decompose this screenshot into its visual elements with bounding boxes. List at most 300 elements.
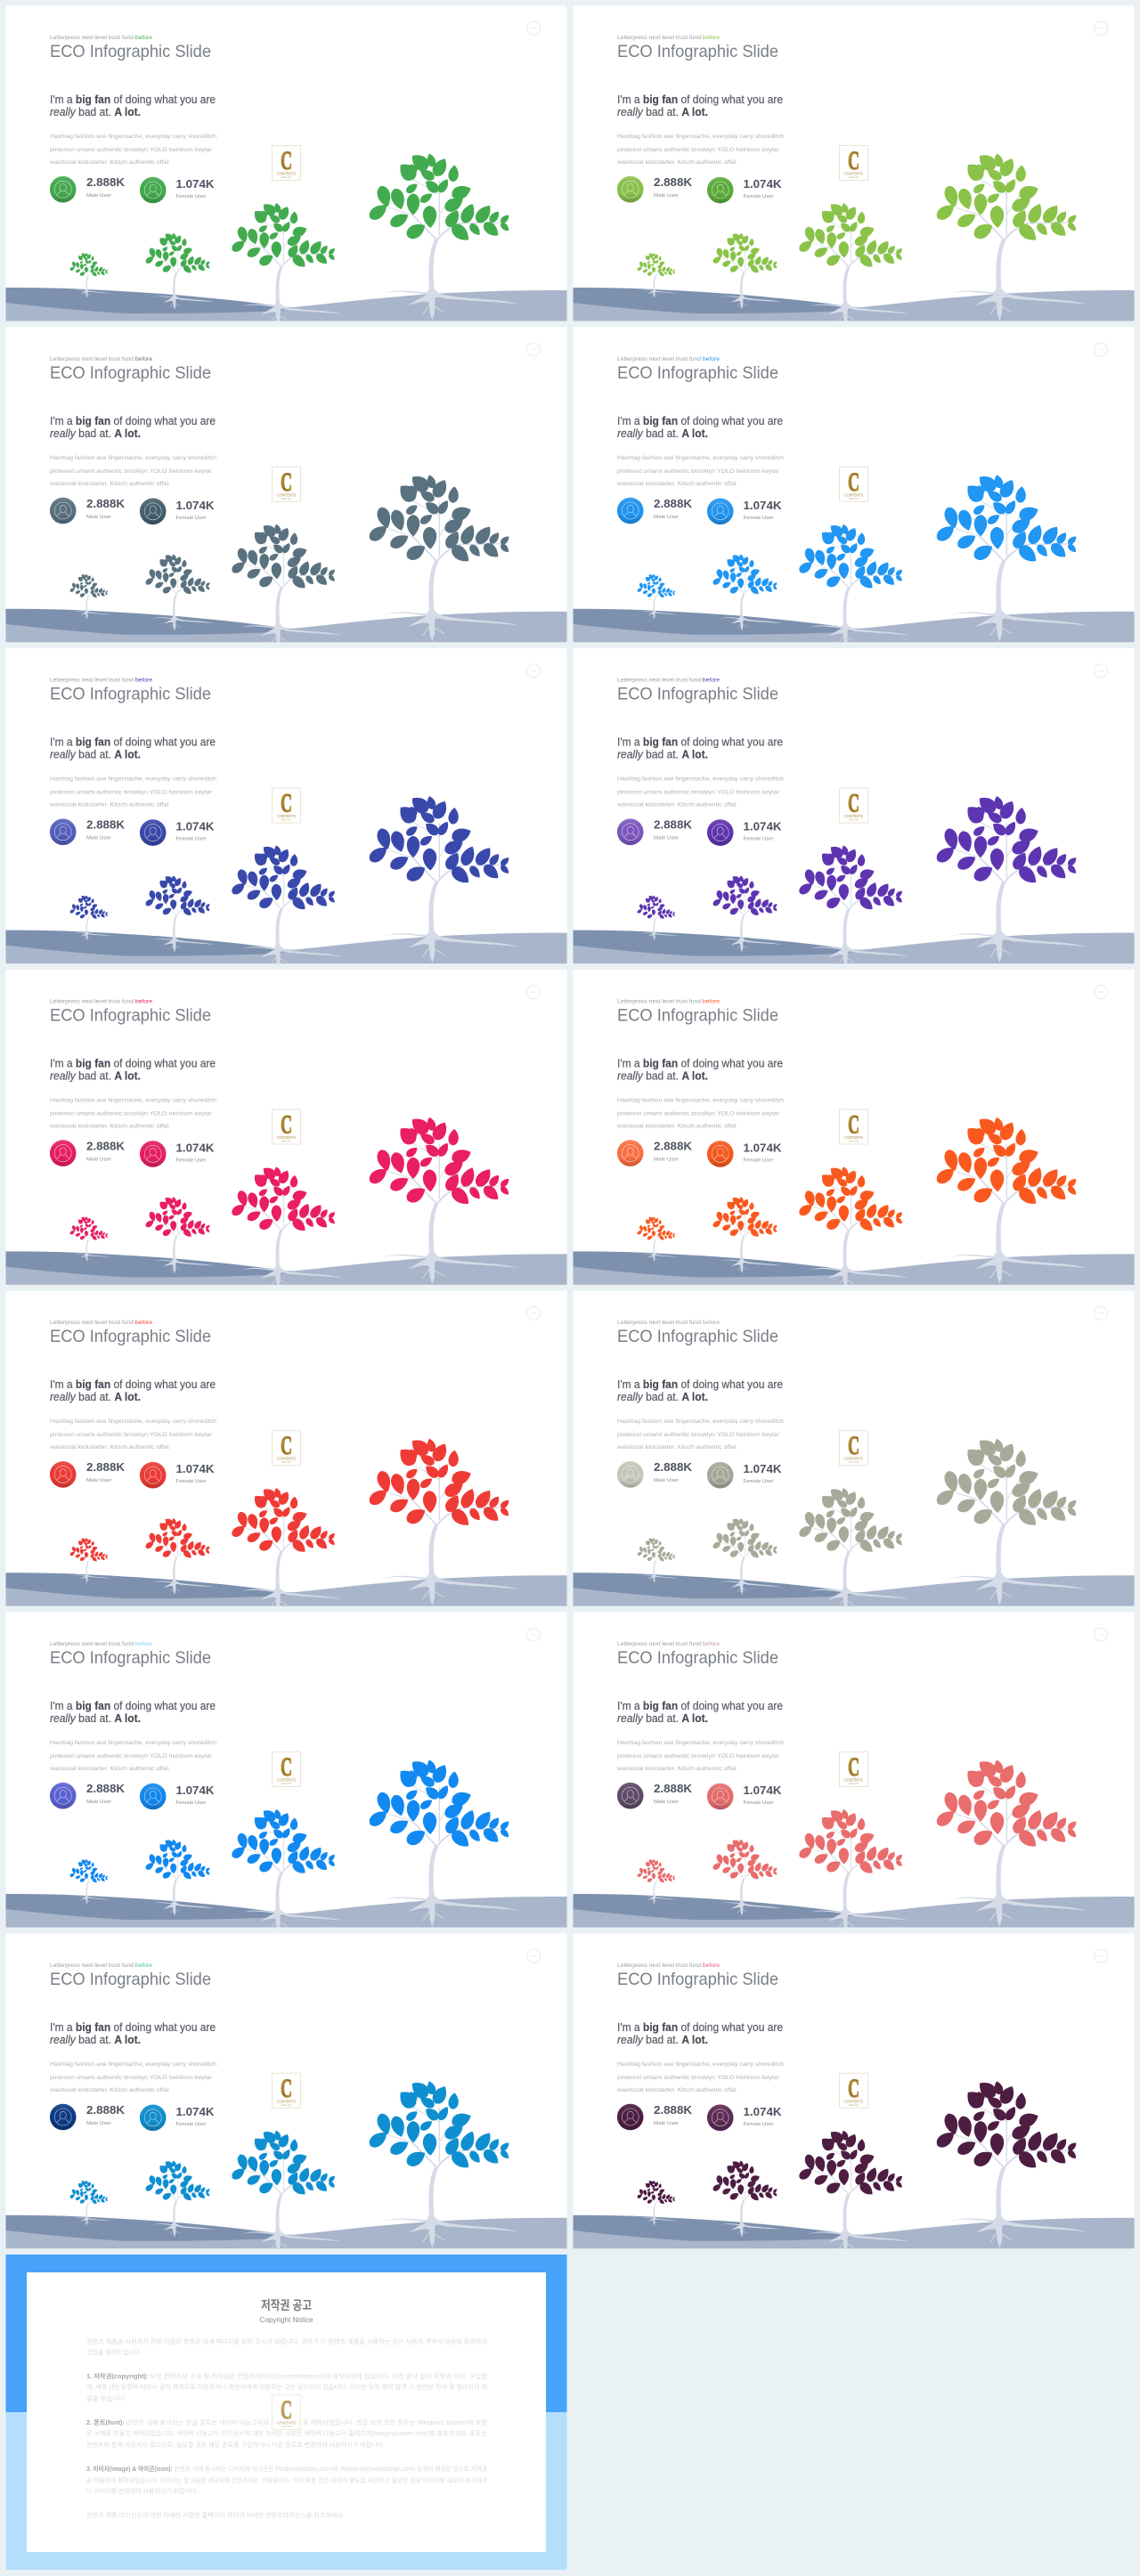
logo badge — [273, 1431, 301, 1466]
stat: male user: Male User — [654, 2121, 679, 2126]
icon: menu dots — [527, 343, 540, 356]
tree: young — [797, 522, 910, 647]
body text: pinterest umami authentic brooklyn YOLO heirloom keytar — [50, 1110, 213, 1117]
logo badge — [273, 2073, 301, 2108]
body text: waistcoat kickstarter. Kitsch authentic offal. — [49, 1444, 170, 1451]
stat: male user — [50, 1461, 125, 1488]
stat: female user: 1.074K — [176, 1463, 214, 1475]
stat: female user: Female User — [176, 516, 207, 521]
stat: female user — [140, 499, 214, 524]
stat: female user: 1.074K — [176, 1142, 214, 1154]
stat: female user — [707, 2105, 782, 2131]
icon: menu dots — [1094, 1949, 1108, 1962]
tree: mature — [933, 1114, 1087, 1284]
heading — [617, 2021, 783, 2046]
panel: azure slide — [5, 1612, 566, 1927]
heading — [50, 1378, 216, 1403]
tree: young — [797, 200, 910, 326]
logo badge — [839, 2073, 867, 2108]
copyright intro: 것임을 알려드립니다. — [86, 2348, 142, 2356]
title: ECO Infographic Slide — [50, 1970, 211, 1989]
ground — [573, 1572, 1135, 1607]
heading — [50, 1700, 216, 1725]
body text: Hashtag fashion axe fingerstache, everyday carry shoreditch — [50, 455, 216, 461]
stat: male user — [50, 1783, 125, 1809]
body text: pinterest umami authentic brooklyn YOLO heirloom keytar — [617, 468, 780, 475]
stat: male user: 2.888K — [86, 819, 125, 832]
tree: seedling — [637, 2180, 678, 2225]
copyright clause 2: 된 서체로 만들고 제작되었습니다. 네이버 나눔고딕 라이선스에 대한 자세한 사항은 네이버 나눔고딕 홈페이지(hangeul.naver.com)를 참조하세요. 폰트는 — [86, 2429, 488, 2437]
icon: menu dots — [527, 1949, 540, 1962]
body text: Hashtag fashion axe fingerstache, everyday carry shoreditch — [617, 134, 784, 140]
stat: male user: 2.888K — [654, 176, 692, 189]
stat: female user: 1.074K — [743, 2106, 782, 2118]
tree: sapling — [144, 874, 215, 952]
stat: male user: Male User — [86, 2121, 111, 2126]
title: ECO Infographic Slide — [50, 1327, 211, 1346]
panel: copyright notice — [5, 2255, 566, 2570]
icon: menu dots — [527, 21, 540, 35]
heading: really bad at. A lot. — [617, 1712, 708, 1725]
icon: menu dots — [1094, 21, 1108, 35]
tree: seedling — [637, 1215, 678, 1262]
ground — [5, 609, 567, 644]
body text: pinterest umami authentic brooklyn YOLO heirloom keytar — [50, 790, 213, 796]
tree: seedling — [69, 1215, 110, 1262]
heading — [50, 415, 216, 440]
stat: female user — [707, 1141, 782, 1167]
stat: female user: Female User — [743, 1479, 774, 1484]
body text — [616, 2061, 784, 2093]
body text: pinterest umami authentic brooklyn YOLO heirloom keytar — [50, 468, 213, 475]
heading: really bad at. A lot. — [617, 2034, 708, 2046]
body text: pinterest umami authentic brooklyn YOLO heirloom keytar — [50, 147, 213, 153]
panel: salmon slide — [574, 1612, 1135, 1927]
body text: Hashtag fashion axe fingerstache, everyday carry shoreditch — [50, 1740, 216, 1746]
body text: pinterest umami authentic brooklyn YOLO heirloom keytar — [50, 1753, 213, 1759]
tree: young — [797, 1485, 910, 1612]
copyright clause 1: 1. 저작권(copyright): 모든 컨텐츠의 소유 및 저작권은 컨텐츠메이커(Contentstoreout)와 제작자에게 있습니다. 사전 승낙 없이 모방과 이로, 구입한 — [86, 2372, 488, 2380]
logo badge — [839, 1431, 867, 1466]
stat: female user: Female User — [743, 2122, 774, 2127]
ground — [573, 1894, 1135, 1929]
stat: male user — [617, 819, 692, 845]
stat: male user — [50, 1140, 125, 1166]
icon: menu dots — [527, 986, 540, 999]
tree: young — [230, 1807, 343, 1932]
logo badge — [273, 2395, 301, 2429]
copyright title — [260, 2298, 314, 2324]
stat: female user — [707, 177, 782, 203]
panel: slate slide — [5, 327, 566, 643]
heading: I'm a big fan of doing what you are — [50, 1700, 216, 1712]
stat: female user — [140, 1141, 214, 1167]
stat: male user: Male User — [86, 1157, 111, 1162]
stat: male user: Male User — [654, 193, 679, 199]
tree: seedling — [637, 1537, 678, 1583]
stat: male user: 2.888K — [654, 819, 692, 832]
tree: mature — [933, 472, 1087, 642]
ground — [573, 288, 1135, 322]
body text: waistcoat kickstarter. Kitsch authentic offal. — [49, 1766, 170, 1772]
stat: male user: 2.888K — [86, 1140, 125, 1152]
tree: sapling — [712, 874, 782, 952]
tree: seedling — [69, 895, 110, 940]
panel: khaki slide — [574, 1291, 1135, 1606]
tree: sapling — [144, 1516, 215, 1595]
stat: male user: Male User — [86, 1800, 111, 1805]
tree: seedling — [69, 2180, 110, 2225]
tree: young — [230, 2128, 343, 2254]
stat: male user: 2.888K — [86, 176, 125, 189]
heading: really bad at. A lot. — [50, 1712, 141, 1725]
icon: menu dots — [1094, 664, 1108, 678]
body text: Hashtag fashion axe fingerstache, everyday carry shoreditch — [617, 776, 784, 783]
body text: Hashtag fashion axe fingerstache, everyday carry shoreditch — [617, 1418, 784, 1425]
stat: male user — [50, 2104, 125, 2130]
stat: male user — [617, 1783, 692, 1809]
eyebrow text: Letterpress next level trust fund before — [50, 1641, 152, 1647]
body text: pinterest umami authentic brooklyn YOLO heirloom keytar — [617, 790, 780, 796]
tree: sapling — [712, 553, 782, 631]
copyright intro — [86, 2337, 487, 2356]
ground — [573, 1251, 1135, 1286]
stat: female user: Female User — [743, 516, 774, 521]
heading: really bad at. A lot. — [617, 106, 708, 118]
copyright title: Copyright Notice — [260, 2315, 314, 2324]
tree: sapling — [712, 232, 782, 310]
stat: male user: 2.888K — [86, 1461, 125, 1474]
logo badge — [273, 146, 301, 180]
heading: really bad at. A lot. — [617, 1391, 708, 1403]
panel: cerulean slide — [5, 1933, 566, 2249]
body text — [49, 1418, 216, 1451]
stat: male user — [617, 1461, 692, 1488]
tree: young — [230, 200, 343, 326]
heading: really bad at. A lot. — [50, 2034, 141, 2046]
ground — [573, 930, 1135, 965]
title: ECO Infographic Slide — [50, 1648, 211, 1668]
body text: waistcoat kickstarter. Kitsch authentic offal. — [616, 1123, 737, 1129]
icon: menu dots — [1094, 986, 1108, 999]
body text: Hashtag fashion axe fingerstache, everyday carry shoreditch — [617, 455, 784, 461]
body text — [49, 776, 216, 809]
body text — [49, 1740, 216, 1772]
panel: green slide — [5, 5, 566, 321]
heading: I'm a big fan of doing what you are — [617, 1700, 783, 1712]
stat: female user: Female User — [176, 1479, 207, 1484]
heading: I'm a big fan of doing what you are — [50, 736, 216, 749]
body text: waistcoat kickstarter. Kitsch authentic offal. — [49, 481, 170, 487]
eyebrow text: Letterpress next level trust fund before — [50, 356, 152, 362]
stat: male user — [50, 819, 125, 845]
heading — [50, 736, 216, 761]
copyright clause 3: 다 이미지를 변경하여 사용하시기 바랍니다. — [86, 2487, 198, 2495]
stat: female user — [707, 499, 782, 524]
body text: waistcoat kickstarter. Kitsch authentic offal. — [49, 159, 170, 166]
tree: seedling — [637, 1858, 678, 1905]
body text: Hashtag fashion axe fingerstache, everyday carry shoreditch — [617, 2061, 784, 2068]
title: ECO Infographic Slide — [617, 1970, 778, 1989]
stat: female user: Female User — [176, 837, 207, 842]
tree: seedling — [69, 573, 110, 619]
tree: seedling — [69, 252, 110, 298]
heading: I'm a big fan of doing what you are — [617, 93, 783, 106]
body text — [616, 776, 784, 809]
copyright clause 1: 벌을 받습니다. — [86, 2394, 126, 2402]
copyright clause 1 — [86, 2372, 488, 2402]
stat: male user: Male User — [86, 193, 111, 199]
tree: sapling — [712, 2159, 782, 2238]
body text — [616, 1740, 784, 1772]
stat: female user: 1.074K — [743, 821, 782, 833]
stat: male user — [50, 176, 125, 203]
stat: female user — [140, 819, 214, 846]
eyebrow text: Letterpress next level trust fund before — [50, 1320, 152, 1326]
heading — [50, 2021, 216, 2046]
eyebrow text: Letterpress next level trust fund before — [50, 35, 152, 41]
heading: I'm a big fan of doing what you are — [50, 93, 216, 106]
stat: male user: 2.888K — [86, 1783, 125, 1795]
stat: female user — [140, 1784, 214, 1809]
title: ECO Infographic Slide — [617, 42, 778, 61]
body text: pinterest umami authentic brooklyn YOLO heirloom keytar — [617, 1432, 780, 1438]
copyright title: 저작권 공고 — [261, 2298, 312, 2312]
heading: really bad at. A lot. — [50, 427, 141, 440]
tree: young — [797, 843, 910, 969]
stat: female user: Female User — [743, 1158, 774, 1163]
tree: sapling — [712, 1195, 782, 1273]
stat: male user: 2.888K — [654, 498, 692, 510]
heading: I'm a big fan of doing what you are — [617, 736, 783, 749]
stat: male user: Male User — [86, 1478, 111, 1483]
stat: female user: 1.074K — [176, 500, 214, 512]
heading — [617, 1057, 783, 1082]
body text: pinterest umami authentic brooklyn YOLO heirloom keytar — [50, 1432, 213, 1438]
stat: male user: 2.888K — [654, 1783, 692, 1795]
heading: I'm a big fan of doing what you are — [617, 1378, 783, 1391]
logo badge — [273, 788, 301, 823]
stat: male user — [617, 498, 692, 524]
panel: orange slide — [574, 970, 1135, 1285]
body text — [616, 455, 784, 487]
heading: I'm a big fan of doing what you are — [50, 2021, 216, 2034]
tree: seedling — [637, 573, 678, 619]
eyebrow text: Letterpress next level trust fund before — [617, 678, 720, 684]
heading: really bad at. A lot. — [617, 1069, 708, 1082]
body text: waistcoat kickstarter. Kitsch authentic offal. — [49, 2087, 170, 2093]
heading — [617, 736, 783, 761]
body text — [49, 455, 216, 487]
logo badge — [839, 146, 867, 180]
body text: Hashtag fashion axe fingerstache, everyday carry shoreditch — [617, 1097, 784, 1103]
panel: light green slide — [574, 5, 1135, 321]
stat: male user — [617, 1140, 692, 1166]
tree: mature — [933, 1435, 1087, 1605]
tree: young — [230, 1165, 343, 1290]
tree: sapling — [144, 553, 215, 631]
heading: really bad at. A lot. — [617, 427, 708, 440]
stat: male user: Male User — [654, 836, 679, 841]
logo badge — [273, 467, 301, 501]
logo badge — [273, 1752, 301, 1786]
heading — [617, 1378, 783, 1403]
tree: sapling — [144, 232, 215, 310]
tree: mature — [933, 150, 1087, 321]
tree: seedling — [69, 1858, 110, 1905]
tree: mature — [366, 793, 519, 963]
ground — [573, 2215, 1135, 2250]
tree: young — [797, 1807, 910, 1932]
stat: male user: Male User — [654, 515, 679, 520]
heading: really bad at. A lot. — [50, 1391, 141, 1403]
body text — [49, 2061, 216, 2093]
heading: I'm a big fan of doing what you are — [50, 1378, 216, 1391]
title: ECO Infographic Slide — [50, 42, 211, 61]
tree: sapling — [144, 2159, 215, 2238]
stat: female user: Female User — [176, 194, 207, 199]
ground — [5, 2215, 567, 2250]
heading: really bad at. A lot. — [50, 1069, 141, 1082]
eyebrow text: Letterpress next level trust fund before — [617, 1962, 720, 1969]
tree: sapling — [712, 1516, 782, 1595]
tree: young — [230, 522, 343, 647]
body text — [616, 134, 784, 166]
body text: waistcoat kickstarter. Kitsch authentic offal. — [616, 1444, 737, 1451]
body text: waistcoat kickstarter. Kitsch authentic offal. — [616, 2087, 737, 2093]
stat: male user: 2.888K — [86, 2104, 125, 2117]
stat: male user: Male User — [654, 1157, 679, 1162]
ground — [5, 1251, 567, 1286]
heading — [50, 93, 216, 118]
stat: male user — [50, 498, 125, 524]
stat: male user: Male User — [654, 1478, 679, 1483]
body text: Hashtag fashion axe fingerstache, everyday carry shoreditch — [50, 1097, 216, 1103]
ground — [5, 288, 567, 322]
stat: male user: Male User — [654, 1800, 679, 1805]
icon: menu dots — [527, 664, 540, 678]
stat: male user: Male User — [86, 515, 111, 520]
stat: female user — [707, 819, 782, 846]
tree: seedling — [637, 895, 678, 940]
body text: waistcoat kickstarter. Kitsch authentic offal. — [616, 159, 737, 166]
icon: menu dots — [1094, 1306, 1108, 1320]
stat: female user: 1.074K — [743, 500, 782, 512]
copyright clause 3: 3. 이미지(image) & 아이콘(icon): 컨텐츠 내에 표시되는 이미지와 아이콘은 Pixabay(pixabay.com)와 Webdesign(webdesign.com) 등에서 제공한 것으로 저작권 — [86, 2465, 487, 2473]
copyright clause 2 — [86, 2418, 488, 2449]
icon: menu dots — [527, 1628, 540, 1641]
stat: male user: 2.888K — [654, 1461, 692, 1474]
ground — [573, 609, 1135, 644]
heading: I'm a big fan of doing what you are — [617, 415, 783, 427]
stat: female user: 1.074K — [743, 1784, 782, 1797]
ground — [5, 1572, 567, 1607]
heading: really bad at. A lot. — [617, 749, 708, 761]
tree: mature — [933, 2078, 1087, 2248]
title: ECO Infographic Slide — [50, 685, 211, 704]
copyright clause 1: 제, 배포 (전) 유형에 따라서 권리 목적으로 이용하거나 재판사에게 이용하는 것은 금지되어 있습니다. 이러한 모방 행위 발견 시 관련된 민사 및 형사상의 처 — [86, 2383, 487, 2391]
panel: red slide — [5, 1291, 566, 1606]
body text — [49, 134, 216, 166]
ground — [5, 1894, 567, 1929]
eyebrow text: Letterpress next level trust fund before — [617, 35, 720, 41]
heading: I'm a big fan of doing what you are — [617, 2021, 783, 2034]
stat: female user: Female User — [743, 837, 774, 842]
stat: female user: Female User — [743, 194, 774, 199]
title: ECO Infographic Slide — [617, 1327, 778, 1346]
tree: mature — [366, 472, 519, 642]
body text: pinterest umami authentic brooklyn YOLO heirloom keytar — [617, 1110, 780, 1117]
body text: waistcoat kickstarter. Kitsch authentic offal. — [616, 481, 737, 487]
panel: pink slide — [5, 970, 566, 1285]
logo badge — [839, 1109, 867, 1144]
stat: female user: 1.074K — [743, 1142, 782, 1154]
panel: plum slide — [574, 1933, 1135, 2249]
copyright clause 3: 을 이용하여 제작되었습니다. 이미지는 참고용만 제공되며 컨텐츠에는 기재됩니다. 이미 포함 것은 귀하가 별도로 확인하고 필요한 경우 이미지를 새로이 추가하여 — [86, 2476, 487, 2484]
tree: mature — [366, 1435, 519, 1605]
copyright intro: 컨텐츠 제품을 사용하기 전에 다음의 항목과 상세 페이지를 읽어 주시기 바랍니다. 귀하가 이 컨텐츠 제품을 사용하는 것은 사용자 계약서 내용에 동의하여 — [86, 2337, 487, 2345]
eyebrow text: Letterpress next level trust fund before — [617, 1320, 720, 1326]
stat: female user: Female User — [176, 1158, 207, 1163]
stat: male user — [617, 176, 692, 203]
icon: menu dots — [527, 1306, 540, 1320]
title: ECO Infographic Slide — [617, 685, 778, 704]
heading — [617, 415, 783, 440]
eyebrow text: Letterpress next level trust fund before — [617, 1641, 720, 1647]
heading: I'm a big fan of doing what you are — [617, 1057, 783, 1069]
title: ECO Infographic Slide — [50, 363, 211, 383]
heading — [617, 93, 783, 118]
stat: male user: 2.888K — [654, 1140, 692, 1152]
stat: female user: Female User — [743, 1800, 774, 1806]
body text: Hashtag fashion axe fingerstache, everyday carry shoreditch — [50, 2061, 216, 2068]
eyebrow text: Letterpress next level trust fund before — [50, 1962, 152, 1969]
stat: female user — [707, 1784, 782, 1809]
tree: sapling — [144, 1195, 215, 1273]
logo badge — [273, 1109, 301, 1144]
body text — [616, 1418, 784, 1451]
body text: Hashtag fashion axe fingerstache, everyday carry shoreditch — [50, 134, 216, 140]
copyright footer line: 컨텐츠 제품 라이선스에 대한 자세한 사항은 홈페이지 하단에 자세한 컨텐츠라이선스를 참조하세요. — [86, 2511, 345, 2519]
stat: male user: 2.888K — [654, 2104, 692, 2117]
title: ECO Infographic Slide — [617, 1005, 778, 1025]
body text: Hashtag fashion axe fingerstache, everyday carry shoreditch — [617, 1740, 784, 1746]
stat: female user — [140, 2105, 214, 2131]
tree: sapling — [712, 1838, 782, 1916]
stat: female user: 1.074K — [176, 1784, 214, 1797]
tree: sapling — [144, 1838, 215, 1916]
body text: waistcoat kickstarter. Kitsch authentic offal. — [49, 802, 170, 809]
stat: female user — [140, 177, 214, 203]
stat: female user: Female User — [176, 2122, 207, 2127]
tree: young — [230, 1485, 343, 1612]
logo badge — [839, 788, 867, 823]
body text — [616, 1097, 784, 1129]
body text: pinterest umami authentic brooklyn YOLO heirloom keytar — [617, 1753, 780, 1759]
body text: waistcoat kickstarter. Kitsch authentic offal. — [616, 802, 737, 809]
stat: male user: Male User — [86, 836, 111, 841]
tree: mature — [933, 1757, 1087, 1927]
tree: young — [797, 2128, 910, 2254]
heading: really bad at. A lot. — [50, 106, 141, 118]
body text: waistcoat kickstarter. Kitsch authentic offal. — [49, 1123, 170, 1129]
copyright clause 3 — [86, 2465, 487, 2495]
tree: mature — [366, 150, 519, 321]
body text: pinterest umami authentic brooklyn YOLO heirloom keytar — [617, 147, 780, 153]
panel: blue slide — [574, 327, 1135, 643]
stat: female user — [707, 1462, 782, 1489]
stat: female user: 1.074K — [176, 2106, 214, 2118]
